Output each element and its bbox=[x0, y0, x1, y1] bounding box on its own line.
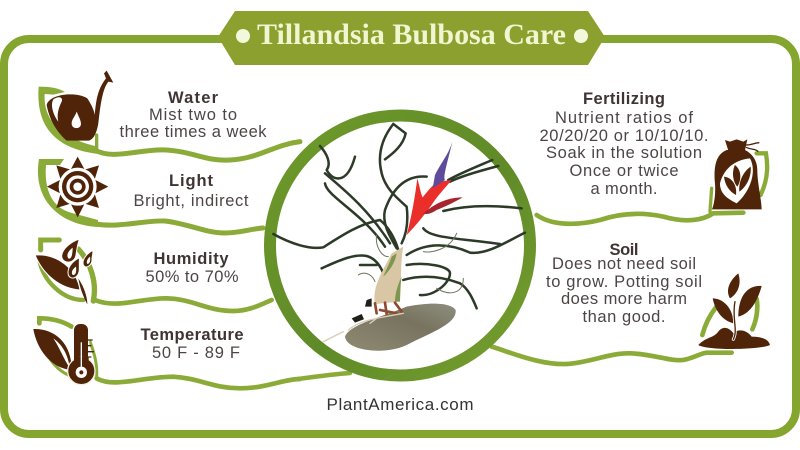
leaves bbox=[273, 124, 525, 308]
light text: Bright, indirect bbox=[134, 192, 249, 210]
temperature text: 50 F - 89 F bbox=[152, 344, 240, 362]
humidity text bbox=[146, 250, 239, 286]
humidity text: Humidity bbox=[154, 250, 229, 268]
light text: Light bbox=[169, 172, 214, 190]
fertilizing text: a month. bbox=[590, 180, 658, 198]
panel: temperature bbox=[33, 318, 300, 388]
fertilizing text: Fertilizing bbox=[583, 90, 665, 108]
temperature text bbox=[140, 326, 244, 362]
water text bbox=[120, 89, 267, 141]
vine: behind medallion lower left bbox=[298, 373, 350, 379]
panel: water bbox=[38, 71, 300, 160]
soil text: to grow. Potting soil bbox=[546, 273, 702, 291]
humidity vine bbox=[39, 240, 272, 311]
soil text: does more harm bbox=[561, 290, 687, 308]
fertilizing text bbox=[540, 90, 708, 198]
soil vine bbox=[492, 299, 757, 364]
icon: sprout in soil bbox=[698, 273, 770, 349]
fertilizing text: Nutrient ratios of bbox=[555, 109, 693, 127]
soil text: Does not need soil bbox=[552, 255, 696, 273]
water text: three times a week bbox=[120, 123, 267, 141]
plant photo bbox=[273, 124, 525, 351]
title banner bbox=[218, 11, 605, 65]
water text: Water bbox=[168, 89, 219, 107]
title: Tillandsia Bulbosa Care bbox=[257, 18, 566, 51]
soil text: than good. bbox=[582, 308, 666, 326]
panel: soil bbox=[492, 241, 770, 364]
website credit: PlantAmerica.com bbox=[326, 395, 474, 414]
fertilizing text: Soak in the solution bbox=[546, 144, 702, 162]
icon: watering can bbox=[47, 71, 113, 141]
roots bbox=[375, 303, 402, 314]
water text: Mist two to bbox=[149, 106, 237, 124]
icon: leaf and drops bbox=[35, 239, 93, 304]
fertilizing text: Once or twice bbox=[570, 162, 678, 180]
stone bbox=[345, 304, 456, 351]
fertilizing text: 20/20/20 or 10/10/10. bbox=[540, 127, 708, 145]
icon: fertilizer sack bbox=[712, 139, 762, 209]
panel: light bbox=[38, 157, 263, 233]
plant medallion bbox=[270, 116, 530, 376]
fertilizing vine bbox=[537, 153, 767, 224]
icon: sun bbox=[47, 157, 108, 217]
light vine bbox=[38, 159, 263, 233]
humidity text: 50% to 70% bbox=[146, 268, 239, 286]
light text bbox=[134, 172, 249, 210]
soil text: Soil bbox=[610, 241, 638, 259]
temperature vine bbox=[39, 318, 300, 388]
stem base bbox=[374, 247, 403, 304]
water vine bbox=[38, 87, 300, 160]
temperature text: Temperature bbox=[140, 326, 244, 344]
panel: fertilizing bbox=[537, 90, 767, 224]
icon: leaf and thermometer bbox=[33, 323, 95, 385]
soil text bbox=[546, 241, 702, 326]
panel: humidity bbox=[35, 239, 272, 311]
flower bbox=[407, 178, 452, 235]
